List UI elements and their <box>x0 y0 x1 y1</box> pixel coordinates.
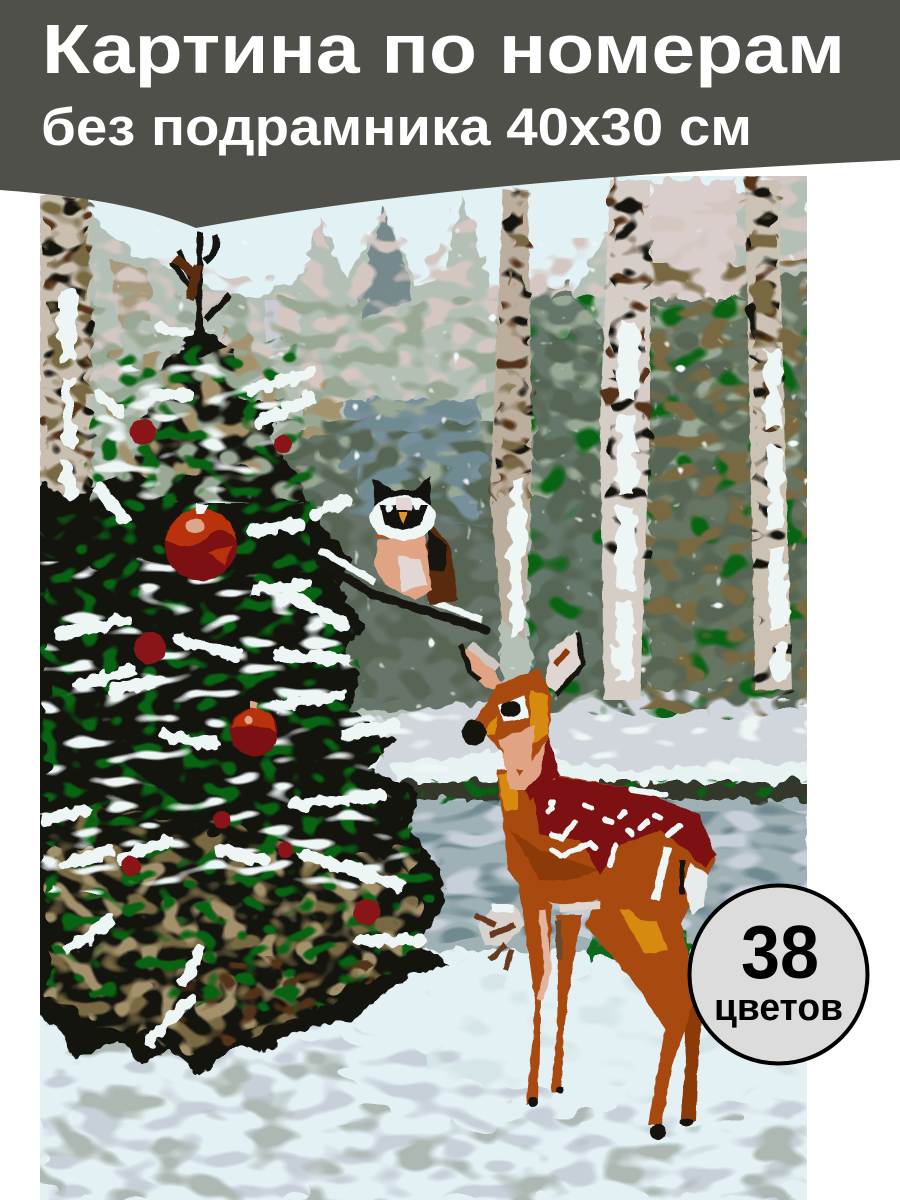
green foliage <box>40 510 430 1015</box>
birch bark mottling <box>45 180 788 690</box>
right birch <box>600 180 650 700</box>
left birch <box>40 195 92 560</box>
deer <box>461 630 716 1140</box>
hooves <box>650 1124 666 1140</box>
badge: 38 colours <box>690 886 868 1064</box>
owl body <box>426 526 458 605</box>
rear near leg <box>584 895 693 1125</box>
deer eye <box>501 701 521 717</box>
tree top twig <box>172 232 230 330</box>
belly <box>560 905 600 908</box>
centre birch <box>490 190 532 640</box>
snow on branches <box>45 328 420 1040</box>
red spotted back <box>530 772 716 875</box>
snow bank <box>370 690 810 785</box>
painting: winter forest with deer <box>30 170 820 1200</box>
front far leg <box>551 915 582 1092</box>
white spots <box>548 790 680 865</box>
flank stripe and shadow <box>655 847 668 900</box>
birch trunks <box>40 180 792 700</box>
white snow masses <box>45 560 420 890</box>
ornament: large red bauble <box>165 503 237 581</box>
owl on branch <box>320 476 486 630</box>
deer head <box>474 668 552 775</box>
upper tree foliage: sage, tan, green and snow <box>90 350 320 500</box>
front near leg <box>518 880 552 1105</box>
tail <box>684 862 708 915</box>
owl head <box>373 476 431 510</box>
left ear <box>461 645 505 690</box>
painting background: sky and forest base <box>30 170 820 1200</box>
neck <box>500 735 555 790</box>
title: Картина по номерам <box>42 10 845 88</box>
tree silhouette <box>30 320 450 1075</box>
small snowy bush by the river <box>475 905 525 970</box>
ornament: medium red bauble <box>230 701 278 756</box>
snow ground <box>691 948 692 949</box>
river bank line <box>400 782 810 803</box>
rear far leg <box>680 1004 702 1122</box>
snow bank, river and ground mottling <box>40 705 810 1200</box>
subtitle: без подрамника 40х30 см <box>41 98 752 157</box>
deer torso <box>497 770 716 925</box>
river <box>400 800 810 950</box>
right ear <box>545 630 583 695</box>
christmas tree <box>30 320 450 1075</box>
ornaments <box>121 419 380 925</box>
snow on birches <box>68 290 780 680</box>
badge number: 38 <box>741 910 819 994</box>
lower tree tan and brown foliage <box>50 800 430 1055</box>
badge label: цветов <box>714 987 843 1029</box>
forest mottling <box>85 170 810 710</box>
ornaments: small red baubles <box>121 419 380 925</box>
far right birch <box>745 180 792 690</box>
header banner <box>0 0 900 228</box>
deer nose <box>462 720 486 746</box>
branch <box>320 562 486 630</box>
